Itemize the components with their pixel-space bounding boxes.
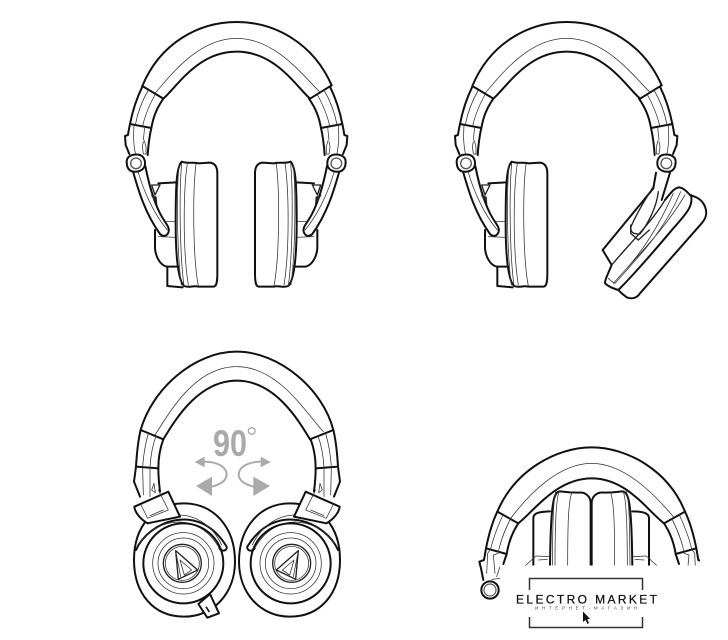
left slider and pivot	[455, 87, 493, 172]
left slider and ear pad	[479, 491, 591, 580]
left slider	[134, 430, 163, 497]
left slider and pivot	[125, 87, 163, 172]
logo name: ELECTRO MARKET	[516, 592, 658, 606]
right slider and ear pad	[592, 491, 703, 580]
white logo panel covering lower headphones	[500, 440, 728, 640]
pivot	[481, 581, 499, 599]
right ear cup with logo	[239, 490, 340, 617]
headband	[472, 22, 662, 99]
headphones: front view, ear cups forward	[125, 22, 347, 287]
icon: mouse cursor	[583, 612, 590, 624]
left ear cup with logo	[134, 490, 235, 617]
cable jack	[198, 594, 219, 618]
headphones: ear cups rotated flat, 90 degrees	[134, 352, 340, 618]
headphones: one ear cup tilted	[455, 22, 706, 298]
right slider and pivot	[639, 87, 677, 172]
logo: Electro Market	[516, 578, 658, 628]
left ear cup	[133, 162, 217, 287]
right slider and pivot	[309, 87, 347, 172]
right slider	[311, 430, 340, 497]
headband	[141, 352, 333, 439]
left ear cup	[463, 162, 547, 287]
label: 90 degrees: 90	[213, 422, 247, 464]
right ear cup	[255, 162, 339, 287]
headband	[142, 22, 332, 99]
rotation arrows	[195, 457, 271, 496]
logo tagline: ИНТЕРНЕТ-МАГАЗИН	[535, 606, 637, 610]
logo bracket frame	[530, 578, 642, 628]
headband	[497, 447, 685, 523]
headphones: folded view, partly covered by logo	[479, 447, 703, 599]
tilted right ear cup	[603, 173, 706, 298]
